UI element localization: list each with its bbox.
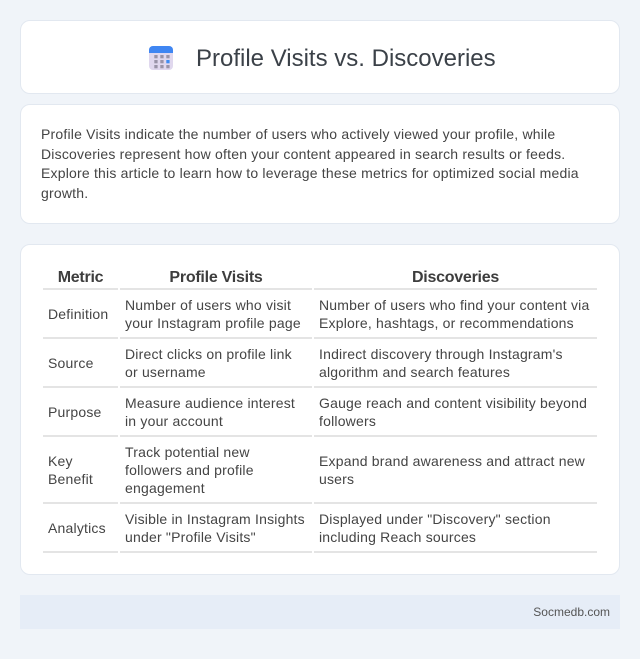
header: metric: Metric xyxy=(58,269,103,286)
title: Profile Visits vs. Discoveries xyxy=(196,45,496,72)
comparison table: Direct clicks on profile link xyxy=(125,346,292,362)
comparison table: Gauge reach and content visibility beyond xyxy=(319,395,587,411)
comparison table: Displayed under "Discovery" section xyxy=(319,511,551,527)
row: source: Source xyxy=(48,355,94,371)
intro text: growth. xyxy=(41,184,88,200)
comparison table: Track potential new xyxy=(125,444,250,460)
comparison table: engagement xyxy=(125,480,205,496)
intro panel xyxy=(20,104,620,224)
comparison table: including Reach sources xyxy=(319,529,476,545)
comparison table: Indirect discovery through Instagram's xyxy=(319,346,563,362)
row: purpose: Purpose xyxy=(48,404,102,420)
header: profile visits: Profile Visits xyxy=(169,269,263,286)
comparison table: algorithm and search features xyxy=(319,364,510,380)
icon: calendar xyxy=(149,46,173,70)
intro text: Discoveries represent how often your content appeared in search results or feeds. xyxy=(41,146,565,162)
header: discoveries: Discoveries xyxy=(412,269,499,286)
comparison table: Expand brand awareness and attract new xyxy=(319,453,585,469)
title panel xyxy=(20,20,620,94)
footer bar xyxy=(20,595,620,629)
comparison table: or username xyxy=(125,364,206,380)
comparison table: under "Profile Visits" xyxy=(125,529,256,545)
footer text: Socmedb.com xyxy=(533,605,610,619)
comparison table: Number of users who visit xyxy=(125,297,291,313)
row: key benefit: Key xyxy=(48,453,73,469)
comparison table: followers xyxy=(319,413,376,429)
comparison table: users xyxy=(319,471,354,487)
comparison table: Explore, hashtags, or recommendations xyxy=(319,315,574,331)
row: key benefit: Benefit xyxy=(48,471,93,487)
row: analytics: Analytics xyxy=(48,520,106,536)
intro text: Explore this article to learn how to leverage these metrics for optimized social media xyxy=(41,165,579,181)
intro text: Profile Visits indicate the number of users who actively viewed your profile, while xyxy=(41,126,555,142)
comparison table: Number of users who find your content via xyxy=(319,297,589,313)
comparison table: Measure audience interest xyxy=(125,395,295,411)
comparison table: in your account xyxy=(125,413,223,429)
comparison table: followers and profile xyxy=(125,462,254,478)
intro text xyxy=(41,126,579,201)
row: definition: Definition xyxy=(48,306,108,322)
row: key benefit xyxy=(48,453,93,487)
comparison table: Visible in Instagram Insights xyxy=(125,511,305,527)
table panel xyxy=(20,244,620,575)
comparison table: your Instagram profile page xyxy=(125,315,301,331)
